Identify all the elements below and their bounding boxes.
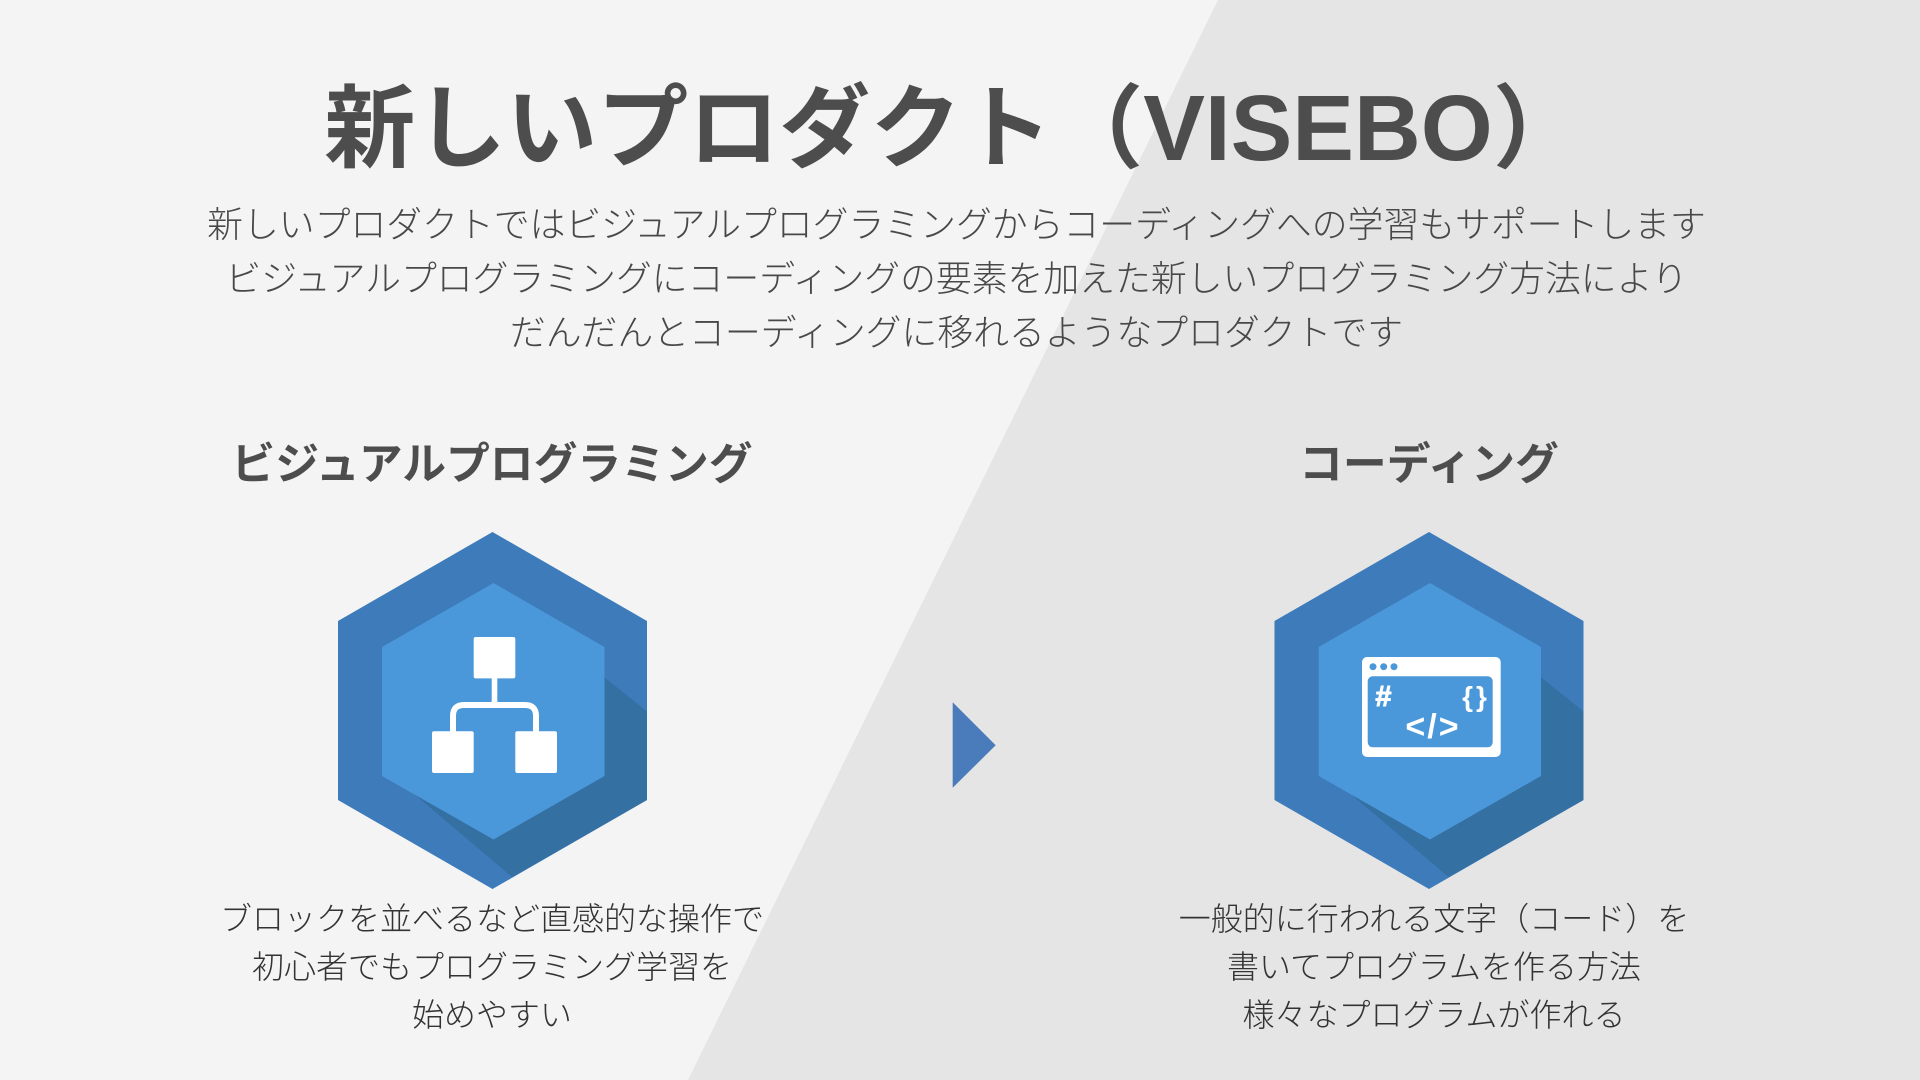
title: 新しいプロダクト（VISEBO） [324, 76, 1584, 180]
caption: visual programming [220, 901, 764, 1033]
intro text: ビジュアルプログラミングにコーディングの要素を加えた新しいプログラミング方法により [225, 259, 1688, 299]
intro text: 新しいプロダクトではビジュアルプログラミングからコーディングへの学習もサポートします [207, 205, 1706, 245]
caption: coding: 書いてプログラムを作る方法 [1227, 949, 1641, 985]
icon: code window hexagon: # [1375, 681, 1392, 713]
icon: code window hexagon: {} [1462, 681, 1490, 712]
caption: coding: 様々なプログラムが作れる [1242, 997, 1626, 1033]
caption: coding [1179, 901, 1689, 1033]
caption: visual programming: ブロックを並べるなど直感的な操作で [220, 901, 764, 937]
icon: code window hexagon: </> [1405, 708, 1461, 746]
heading: coding: コーディング [1299, 440, 1559, 489]
intro text [207, 205, 1706, 353]
intro text: だんだんとコーディングに移れるようなプロダクトです [510, 313, 1403, 353]
caption: visual programming: 始めやすい [412, 997, 572, 1033]
heading: visual programming: ビジュアルプログラミング [231, 440, 753, 489]
caption: visual programming: 初心者でもプログラミング学習を [252, 949, 732, 985]
caption: coding: 一般的に行われる文字（コード）を [1179, 901, 1689, 937]
